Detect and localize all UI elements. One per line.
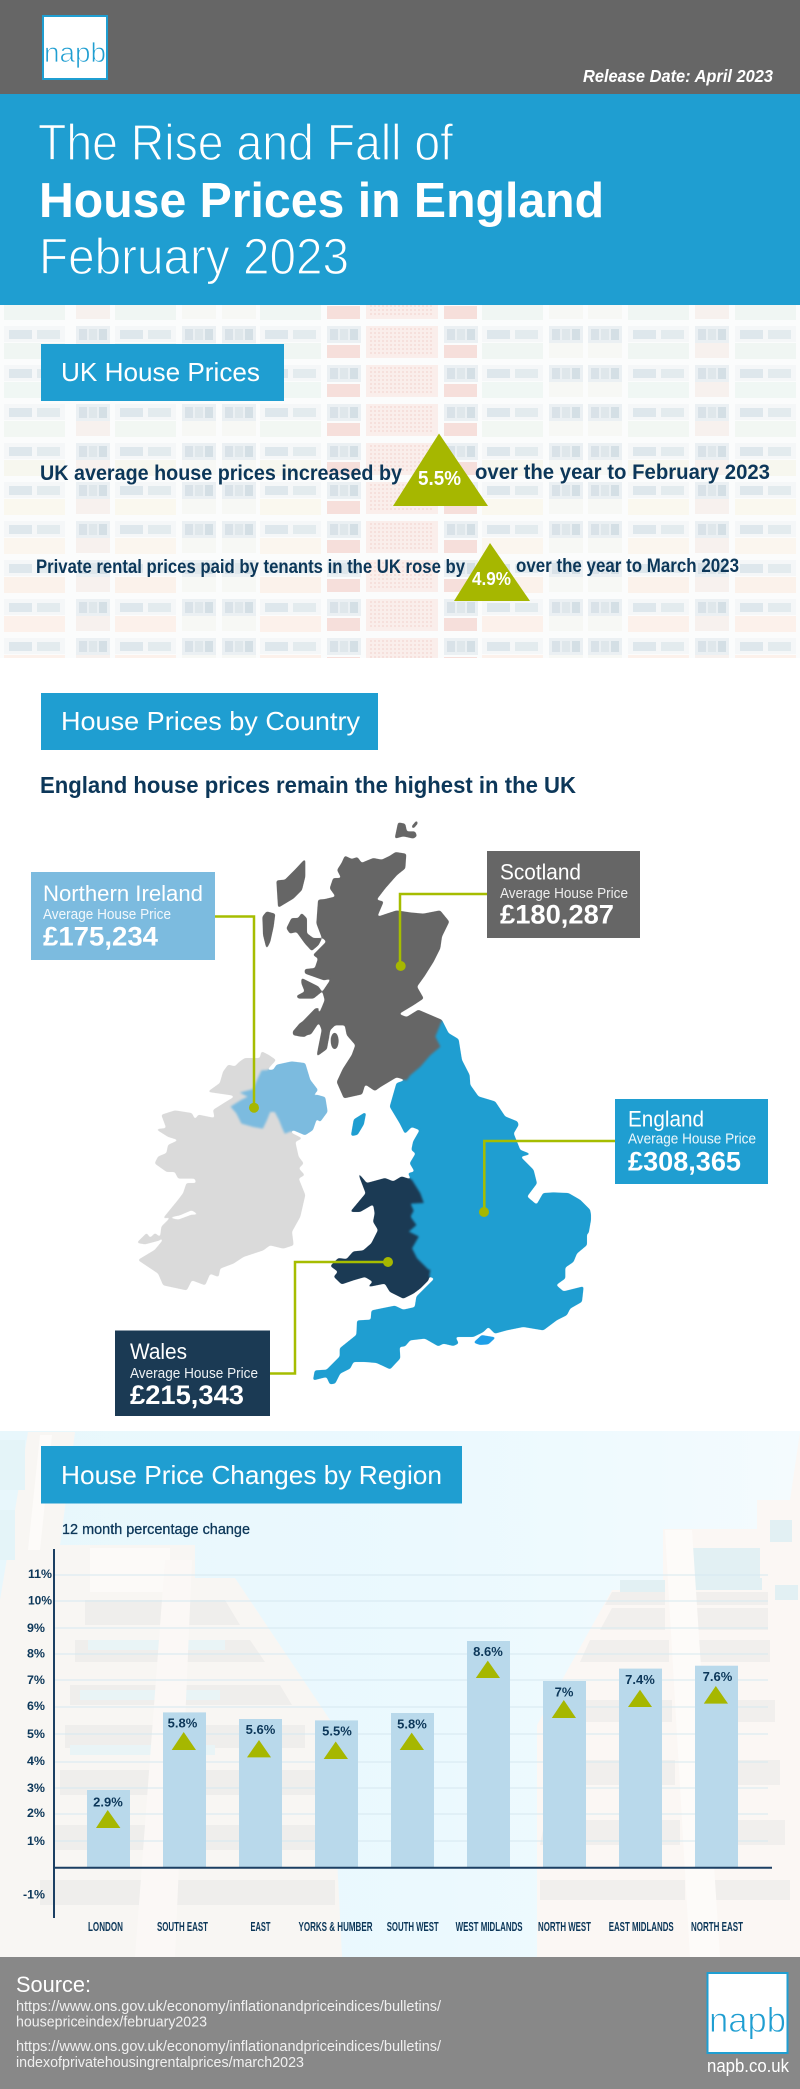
source links: https://www.ons.gov.uk/economy/inflationandpriceindices/bulletins/ <box>16 2038 442 2055</box>
bar: London: 2.9% <box>93 1795 123 1810</box>
panel: house prices by country <box>31 693 768 1416</box>
title line 3: February 2023 <box>39 228 349 285</box>
heading: House Price Changes by Region: House Price Changes by Region <box>61 1460 442 1490</box>
chart subtitle: 12 month percentage change <box>62 1521 250 1538</box>
panel: UK house prices <box>0 287 800 671</box>
bar: Yorks & Humber: YORKS & HUMBER <box>298 1919 373 1934</box>
map: England <box>313 1020 591 1384</box>
bar: South East: 5.8% <box>168 1716 198 1731</box>
bar: London: LONDON <box>88 1919 123 1934</box>
y axis labels: 6% <box>27 1699 45 1713</box>
callout: England: Average House Price <box>628 1132 756 1148</box>
subheading: England house prices remain the highest in the UK <box>40 772 576 798</box>
bar: London <box>87 1790 130 1934</box>
y axis labels: 4% <box>27 1754 45 1768</box>
bar: South West: 5.8% <box>397 1716 427 1731</box>
footer <box>0 1957 800 2089</box>
bar: North East <box>691 1666 743 1934</box>
title line 2: House Prices in England <box>39 174 604 228</box>
statement: house prices: UK average house prices increased by <box>40 461 402 485</box>
y axis labels: 10% <box>28 1594 52 1608</box>
background: tower block windows <box>0 287 800 671</box>
source links <box>16 1998 442 2071</box>
callout: Scotland <box>487 851 640 938</box>
statement: house prices <box>40 434 770 506</box>
icon: up triangle 4.9% <box>454 543 530 601</box>
map: Isle of Wight <box>473 1335 496 1345</box>
icon: up triangle 5.5%: 5.5% <box>418 468 461 490</box>
website: napb.co.uk <box>707 2055 790 2076</box>
callout: Wales <box>115 1330 270 1416</box>
source links: housepriceindex/february2023 <box>16 2013 207 2030</box>
source heading: Source: <box>16 1972 91 1997</box>
bar: East Midlands: EAST MIDLANDS <box>609 1919 674 1934</box>
callout: Northern Ireland: Northern Ireland <box>43 881 203 906</box>
callout: Northern Ireland: £175,234 <box>43 922 158 952</box>
bar: North West <box>538 1681 591 1934</box>
map of UK and Ireland <box>137 821 615 1384</box>
heading: House Price Changes by Region <box>41 1446 462 1504</box>
connector: Scotland <box>396 894 487 971</box>
connector: England <box>479 1141 615 1217</box>
bar: Yorks & Humber <box>298 1720 373 1934</box>
statement: house prices: over the year to February 2023 <box>475 460 770 484</box>
callout: England: £308,365 <box>628 1147 741 1177</box>
y axis labels: 3% <box>27 1781 45 1795</box>
title banner <box>0 94 800 305</box>
callout: Scotland: £180,287 <box>500 900 614 930</box>
panel: house price changes by region <box>0 1431 800 1957</box>
map land shapes <box>137 821 591 1384</box>
bar: East Midlands <box>609 1669 674 1934</box>
statement: rental prices <box>36 543 739 601</box>
icon: up triangle 4.9%: 4.9% <box>472 569 511 589</box>
bar: South West <box>387 1713 439 1934</box>
heading: House Prices by Country: House Prices by Country <box>61 706 360 736</box>
icon: up triangle 5.5% <box>393 434 488 506</box>
background: sky and faded apartment buildings <box>0 1431 800 1957</box>
bar: South West: SOUTH WEST <box>387 1919 439 1934</box>
release date: Release Date: April 2023 <box>583 66 773 86</box>
bar: Yorks & Humber: 5.5% <box>322 1724 352 1738</box>
y axis labels: 9% <box>27 1621 45 1635</box>
y axis labels: 1% <box>27 1834 45 1848</box>
bar: West Midlands: WEST MIDLANDS <box>456 1919 523 1934</box>
header bar <box>0 0 800 94</box>
statement: rental prices: Private rental prices paid by tenants in the UK rose by <box>36 557 465 578</box>
callout: England: England <box>628 1106 704 1132</box>
callout: Northern Ireland <box>31 872 215 960</box>
map: Wales <box>331 1173 430 1298</box>
y axis labels: 2% <box>27 1806 45 1820</box>
callout: Scotland: Scotland <box>500 860 581 884</box>
heading: House Prices by Country <box>41 693 378 750</box>
bar: North East: 7.6% <box>703 1669 733 1684</box>
bar: East: EAST <box>250 1919 271 1934</box>
y axis labels: 7% <box>27 1673 45 1687</box>
connector: Northern Ireland <box>215 916 259 1113</box>
callout: Scotland: Average House Price <box>500 886 628 902</box>
logo: napb footer: napb <box>709 2001 786 2040</box>
bar: South East <box>157 1712 208 1934</box>
bar: South East: SOUTH EAST <box>157 1919 208 1934</box>
bar: East <box>239 1719 282 1934</box>
map: Northern Ireland <box>231 1062 327 1135</box>
map: Republic of Ireland <box>137 1052 305 1290</box>
logo: napb: napb <box>44 37 106 68</box>
source links: indexofprivatehousingrentalprices/march2023 <box>16 2054 304 2071</box>
y axis labels: 8% <box>27 1647 45 1661</box>
title line 1: The Rise and Fall of <box>38 114 454 171</box>
bar: North West: 7% <box>555 1684 574 1699</box>
axes <box>54 1549 772 1918</box>
y axis labels: 5% <box>27 1727 45 1741</box>
bar: West Midlands: 8.6% <box>473 1644 503 1659</box>
callout: Northern Ireland: Average House Price <box>43 907 171 923</box>
callout: Wales: £215,343 <box>130 1380 244 1410</box>
logo: napb footer <box>708 1973 788 2053</box>
heading: UK House Prices <box>41 344 284 401</box>
heading: UK House Prices: UK House Prices <box>61 357 260 387</box>
y axis labels: 11% <box>28 1567 52 1581</box>
bar: North West: NORTH WEST <box>538 1919 591 1934</box>
connector: Wales <box>270 1257 393 1374</box>
bar: East Midlands: 7.4% <box>625 1672 655 1687</box>
callout: Wales: Wales <box>130 1339 187 1364</box>
map: Scotland <box>263 821 449 1098</box>
y axis labels: -1% <box>23 1887 45 1901</box>
source links: https://www.ons.gov.uk/economy/inflationandpriceindices/bulletins/ <box>16 1998 442 2015</box>
callout: England <box>615 1099 768 1184</box>
bar chart <box>23 1549 772 1934</box>
logo: napb <box>43 16 107 79</box>
bar: East: 5.6% <box>246 1722 276 1737</box>
bar: North East: NORTH EAST <box>691 1919 743 1934</box>
y axis labels <box>23 1567 52 1901</box>
statement: rental prices: over the year to March 2023 <box>516 556 739 577</box>
bar: West Midlands <box>456 1641 523 1934</box>
callout: Wales: Average House Price <box>130 1366 258 1382</box>
